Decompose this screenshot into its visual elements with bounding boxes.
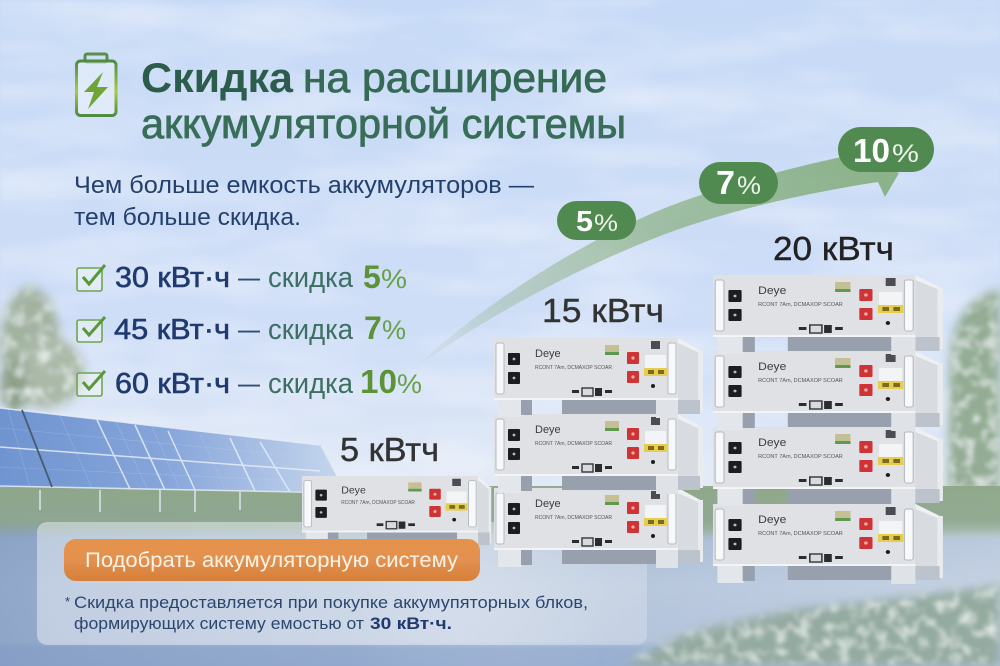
pill: 7%: % bbox=[737, 172, 761, 200]
pill: 5%: % bbox=[594, 210, 618, 237]
battery unit top: RCONT 7Am, DCMAXOP SCOAR bbox=[535, 365, 612, 371]
pill: 10% bbox=[838, 127, 934, 172]
battery unit top: Deye bbox=[535, 348, 561, 360]
item: 30 kWh: скидка bbox=[268, 262, 354, 294]
subtitle: Чем больше емкость аккумуляторов — bbox=[74, 172, 534, 199]
title: Скидка bbox=[141, 54, 294, 101]
battery stack: 5 kWh: 5 кВтч bbox=[340, 431, 439, 468]
item: 30 kWh: 5 bbox=[363, 259, 381, 295]
battery unit: Deye bbox=[341, 485, 366, 496]
battery unit middle: Deye bbox=[535, 424, 561, 436]
battery unit 1: RCONT 7Am, DCMAXOP SCOAR bbox=[758, 302, 843, 308]
item: 60 kWh: 10 bbox=[360, 363, 397, 400]
item: 60 kWh: 60 кВт·ч bbox=[115, 368, 230, 400]
battery stack: 5 kWh bbox=[302, 431, 491, 549]
item: 30 kWh: — bbox=[238, 262, 260, 294]
item: 30 kWh: 30 кВт·ч bbox=[115, 262, 230, 294]
title: на расширение bbox=[303, 54, 607, 101]
battery unit bbox=[302, 476, 491, 549]
button: Подобрать аккумуляторную систему bbox=[85, 549, 459, 572]
item: 60 kWh: скидка bbox=[268, 368, 354, 400]
background: tree right bbox=[948, 290, 1000, 490]
item: 60 kWh: % bbox=[397, 369, 422, 399]
battery stack: 20 kWh bbox=[713, 230, 943, 584]
battery unit 1 bbox=[713, 275, 943, 355]
pill: 10%: % bbox=[892, 140, 919, 168]
item: 60 kWh: — bbox=[238, 368, 260, 400]
battery unit 3: Deye bbox=[758, 437, 786, 449]
item: 30 kWh bbox=[77, 259, 407, 295]
item: 30 kWh: % bbox=[381, 264, 407, 294]
growth arrow bbox=[410, 155, 899, 372]
background: foreground foliage bbox=[620, 585, 1000, 666]
battery stack: 20 kWh: 20 кВтч bbox=[773, 230, 894, 267]
battery unit middle: RCONT 7Am, DCMAXOP SCOAR bbox=[535, 441, 612, 447]
item: 45 kWh: скидка bbox=[268, 314, 354, 346]
battery unit bottom: Deye bbox=[535, 498, 561, 510]
pill: 7% bbox=[699, 162, 778, 204]
battery unit 1: Deye bbox=[758, 285, 786, 297]
pill: 5%: 5 bbox=[576, 206, 593, 238]
footnote: формирующих систему емостью от bbox=[74, 614, 364, 633]
footnote: Скидка предоставляется при покупке аккумупяторных блков, bbox=[74, 593, 588, 612]
subtitle: тем больше скидка. bbox=[74, 204, 301, 231]
icon: battery with lightning bolt bbox=[76, 54, 116, 116]
subtitle bbox=[74, 172, 534, 231]
pill: 5% bbox=[557, 201, 636, 240]
pill: 10%: 10 bbox=[853, 132, 890, 169]
bottom panel bbox=[37, 522, 647, 645]
title: аккумуляторной системы bbox=[141, 100, 626, 147]
battery unit 2: Deye bbox=[758, 361, 786, 373]
item: 45 kWh bbox=[77, 310, 406, 346]
background: ground bbox=[0, 486, 1000, 666]
item: 45 kWh: 7 bbox=[364, 310, 382, 346]
background: tree left bbox=[0, 287, 84, 413]
footnote bbox=[65, 593, 588, 633]
battery unit top bbox=[494, 338, 703, 418]
item: 45 kWh: 45 кВт·ч bbox=[114, 314, 230, 346]
title bbox=[141, 54, 626, 147]
battery stack: 15 kWh: 15 кВтч bbox=[542, 292, 664, 329]
battery unit bottom bbox=[494, 488, 703, 568]
background: solar panels bbox=[0, 408, 345, 512]
battery unit 4: RCONT 7Am, DCMAXOP SCOAR bbox=[758, 531, 843, 537]
battery unit 3: RCONT 7Am, DCMAXOP SCOAR bbox=[758, 454, 843, 460]
battery stack: 15 kWh bbox=[494, 292, 703, 568]
battery unit: RCONT 7Am, DCMAXOP SCOAR bbox=[341, 500, 415, 506]
item: 60 kWh bbox=[77, 363, 422, 400]
item: 45 kWh: — bbox=[238, 314, 260, 346]
battery unit middle bbox=[494, 414, 703, 494]
pill: 7%: 7 bbox=[716, 164, 735, 201]
footnote: * bbox=[65, 594, 70, 609]
battery unit 3 bbox=[713, 427, 943, 507]
battery unit 2 bbox=[713, 351, 943, 431]
item: 45 kWh: % bbox=[382, 315, 406, 345]
battery unit 4 bbox=[713, 504, 943, 584]
battery unit 2: RCONT 7Am, DCMAXOP SCOAR bbox=[758, 378, 843, 384]
footnote: 30 кВт·ч. bbox=[370, 614, 452, 633]
battery unit 4: Deye bbox=[758, 514, 786, 526]
list: discount tiers bbox=[77, 259, 422, 400]
button bbox=[64, 539, 480, 581]
battery unit bottom: RCONT 7Am, DCMAXOP SCOAR bbox=[535, 515, 612, 521]
